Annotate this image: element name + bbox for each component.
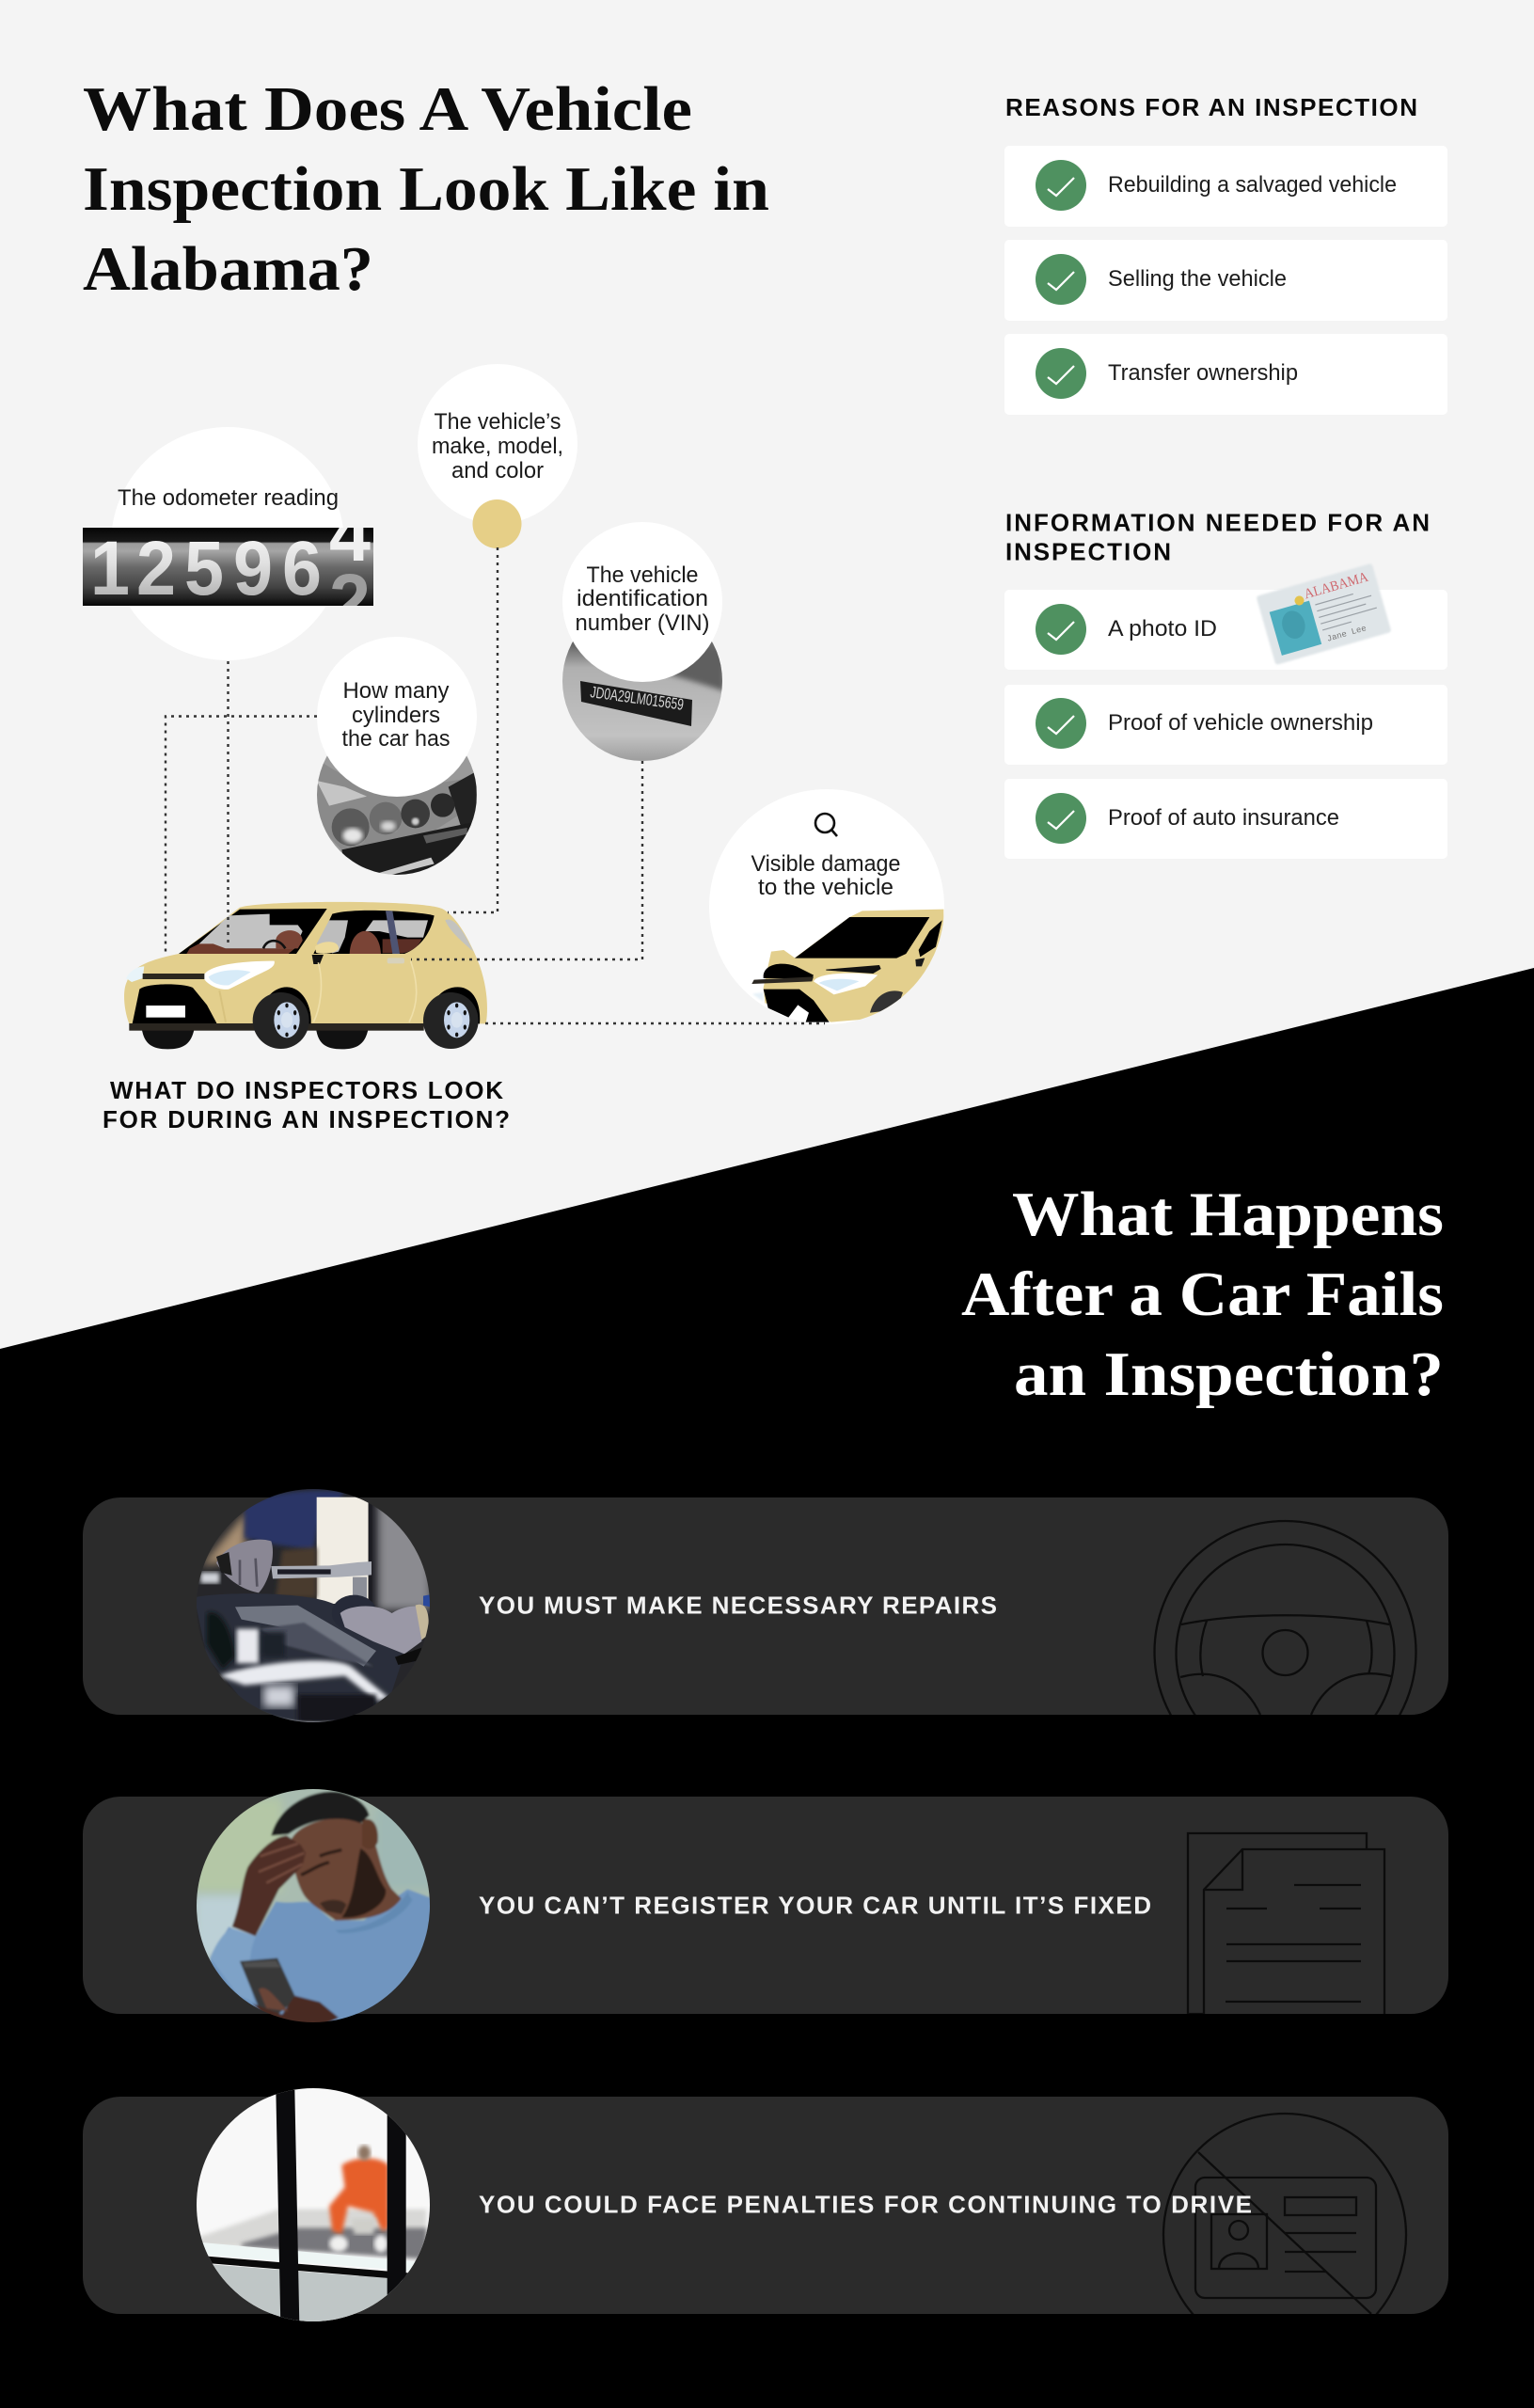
item: selling: [1004, 240, 1447, 321]
list: reasons: [1004, 146, 1447, 415]
photo: engine cylinders: [317, 756, 477, 875]
photo: VIN plate: JD0A29LM015659: [589, 683, 685, 714]
item: insurance: [1004, 779, 1447, 859]
callout: cylinders: [310, 637, 480, 881]
heading: information needed: INFORMATION NEEDED FOR AN: [1005, 508, 1430, 536]
heading: information needed: INSPECTION: [1005, 538, 1171, 566]
callout: cylinders: the car has: [342, 726, 450, 752]
callout: visible damage: Visible damage: [751, 851, 901, 877]
icon: odometer: [83, 528, 373, 606]
heading: what happens after a car fails: What Happens: [1012, 1180, 1444, 1249]
door seams: [313, 961, 417, 1022]
icon: crossed out license: [1162, 2113, 1407, 2314]
mirror: [315, 942, 339, 954]
item: photo id: [1004, 590, 1447, 670]
item: selling: Selling the vehicle: [1108, 266, 1287, 292]
heading: reasons for an inspection: REASONS FOR AN INSPECTION: [1005, 93, 1417, 121]
callout: cylinders: cylinders: [352, 703, 440, 728]
connector lines: [166, 547, 825, 1023]
callout: odometer reading: The odometer reading: [118, 485, 339, 511]
photo: inmate behind bars: [197, 2088, 430, 2321]
wheels: [261, 987, 311, 1023]
far wheels: [142, 1028, 195, 1049]
icon: odometer: 9: [233, 526, 273, 611]
callout: make model color: The vehicle’s: [435, 409, 561, 435]
item: vehicle ownership: [1004, 685, 1447, 765]
item: rebuilding: [1004, 146, 1447, 227]
icon: odometer: 5: [184, 526, 224, 611]
icon: color dot: [472, 499, 521, 548]
callout: cylinders: How many: [342, 678, 450, 704]
icon: odometer: 2: [136, 526, 176, 611]
panel: cannot register: [83, 1782, 1448, 2036]
panel: penalties: [83, 2088, 1448, 2321]
title: What Does A Vehicle: [83, 74, 692, 144]
callout: visible damage: to the vehicle: [758, 875, 894, 900]
icon: odometer: 2: [329, 559, 371, 644]
sill: [129, 1023, 424, 1031]
heading: what happens after a car fails: After a Car Fails: [961, 1259, 1444, 1329]
headlamp: [204, 961, 275, 990]
body: [124, 902, 487, 1023]
icon: odometer: 1: [90, 526, 130, 611]
icon: odometer: 6: [282, 526, 322, 611]
title: Alabama?: [83, 234, 373, 304]
heading: what happens after a car fails: [961, 1180, 1444, 1409]
callout: VIN: [562, 522, 722, 761]
callout: odometer reading: [83, 427, 373, 660]
dark diagonal section background: [0, 968, 1534, 2408]
text: YOU CAN’T REGISTER YOUR CAR UNTIL IT’S FIXED: [479, 1891, 1151, 1919]
list: information needed: [1004, 590, 1447, 859]
windshield: [179, 909, 327, 954]
icon: alabama license: Jane Lee: [1326, 624, 1368, 644]
callout: VIN: The vehicle: [587, 562, 698, 588]
photo: mechanic: [197, 1489, 430, 1722]
heading: what happens after a car fails: an Inspection?: [1014, 1339, 1444, 1409]
photo: VIN plate: [562, 642, 722, 761]
panel: necessary repairs: [83, 1489, 1448, 1722]
callout: VIN: number (VIN): [576, 610, 709, 636]
title: [83, 74, 769, 304]
heading: what do inspectors look for: [103, 1076, 510, 1133]
grille: [133, 984, 217, 1023]
text: YOU MUST MAKE NECESSARY REPAIRS: [479, 1592, 997, 1620]
callout: VIN: identification: [577, 586, 708, 611]
item: photo id: A photo ID: [1108, 616, 1217, 642]
item: vehicle ownership: Proof of vehicle ownership: [1108, 710, 1373, 736]
icon: alabama license: ALABAMA: [1303, 570, 1370, 602]
callout: make model color: [418, 364, 577, 548]
heading: what do inspectors look for: WHAT DO INSPECTORS LOOK: [110, 1076, 503, 1104]
illustration: yellow car: [124, 902, 487, 1049]
icon: magnifier: [815, 814, 837, 836]
item: transfer: Transfer ownership: [1108, 360, 1298, 386]
illustration: damaged car: [751, 910, 943, 1022]
item: transfer: [1004, 334, 1447, 415]
item: insurance: Proof of auto insurance: [1108, 805, 1339, 831]
callout: make model color: make, model,: [432, 434, 563, 459]
heading: information needed: [1005, 508, 1430, 566]
callout: make model color: and color: [451, 458, 544, 483]
icon: document: [1188, 1833, 1384, 2014]
icon: odometer: 4: [329, 492, 371, 578]
callout: visible damage: [709, 789, 944, 1024]
icon: alabama license: [1257, 563, 1391, 665]
photo: worried man: [197, 1789, 430, 2022]
heading: what do inspectors look for: FOR DURING AN INSPECTION?: [103, 1105, 510, 1133]
item: rebuilding: Rebuilding a salvaged vehicle: [1108, 172, 1397, 198]
rear glass: [445, 919, 473, 952]
text: YOU COULD FACE PENALTIES FOR CONTINUING TO DRIVE: [479, 2190, 1252, 2218]
icon: steering wheel: [1153, 1520, 1417, 1715]
side window: [313, 911, 435, 954]
title: Inspection Look Like in: [83, 154, 769, 224]
